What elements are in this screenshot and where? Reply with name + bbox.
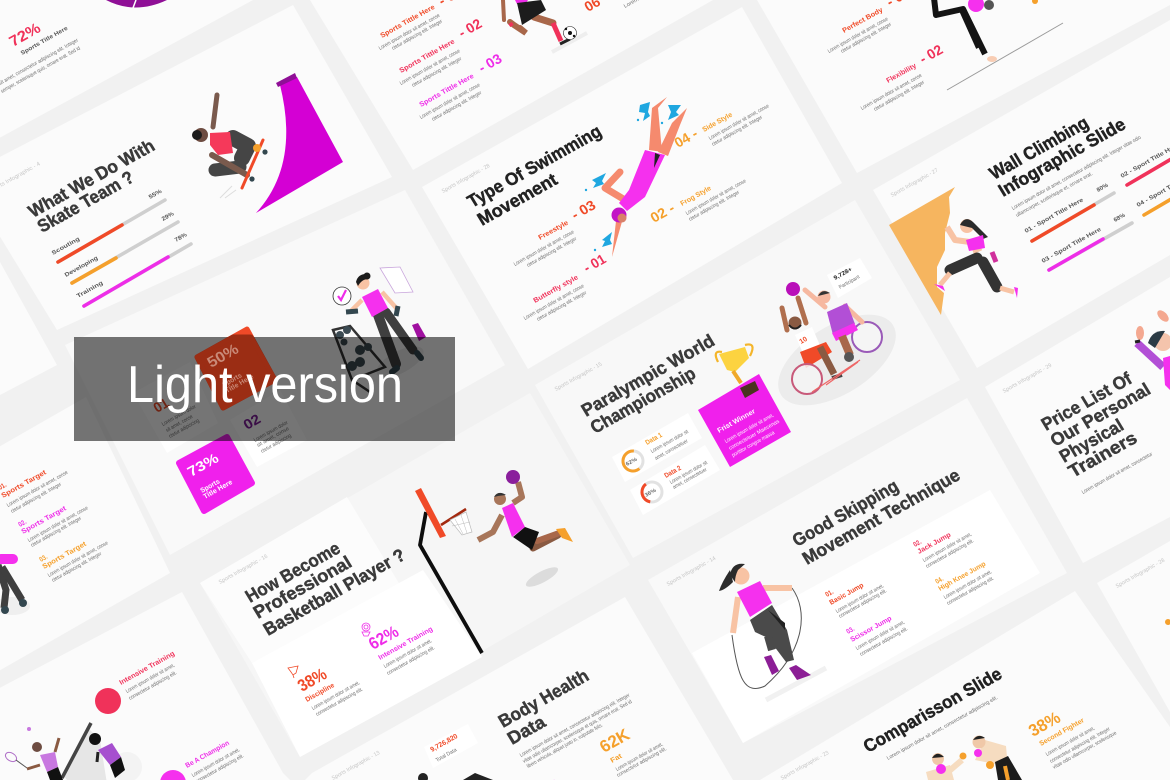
progress labels: 02 - Sport Title Here: [1120, 142, 1170, 180]
list item 1: ctetur adipiscing elit. Integer: [391, 19, 444, 52]
label card: [424, 724, 478, 768]
gym illustration: [333, 267, 428, 392]
title: Paralympic World: [578, 331, 718, 420]
info card 02: Lorem ipsum dolor: [253, 420, 289, 444]
info card 02: 02: [240, 410, 264, 433]
first winner card: Lorem ipsum dolor sit amet,: [724, 413, 775, 445]
stat 38 percent: vitae odio ullamcorper, scelerisque: [1052, 730, 1118, 771]
list item 3: Sports Tittle Here: [418, 73, 475, 109]
swimmer illustration: [585, 97, 687, 257]
slide: gym: [65, 190, 505, 555]
item flexibility: ctetur adipiscing elit. Integer: [873, 80, 926, 113]
item be a champion: Be A Champion: [184, 740, 231, 770]
list item 2: Lorem ipsum dolor sit amet, conse: [399, 48, 461, 87]
description: Lorem ipsum dolor sit amet, consectetur adipiscing elit. Integer vitae odio: [1011, 135, 1142, 212]
progress labels: Developing: [64, 255, 100, 279]
item 02: 02.: [912, 539, 923, 549]
progress labels: 55%: [148, 189, 163, 201]
item 03 freestyle: ctetur adipiscing elit. Integer: [526, 236, 578, 269]
badminton illustration: [4, 723, 142, 780]
white panel: [692, 490, 1040, 743]
50 percent card under banner: Sports: [221, 372, 243, 389]
item flexibility: [860, 41, 946, 113]
item 02 frog style: Lorem ipsum dolor sit amet, conse: [685, 178, 747, 217]
overlay banner: [74, 337, 455, 441]
list item 6: [581, 0, 686, 15]
item 01: Basic Jump: [828, 582, 865, 607]
item 01: consectetur adipiscing elit.: [838, 588, 888, 620]
slide: sports target: [0, 397, 170, 676]
data card 1: 62%: [625, 457, 639, 468]
info card 01: sit amet, conse: [165, 414, 194, 434]
slide number: Sports Infographic - 14: [666, 556, 717, 588]
label card: Total Data: [435, 747, 458, 764]
trophy: [716, 344, 759, 398]
slide: swimming: [422, 7, 842, 369]
title: Trainers: [1065, 428, 1141, 481]
item 03: Scissor Jump: [849, 615, 893, 644]
target 01: Lorem ipsum dolor sit amet, conse: [6, 470, 69, 509]
slide: basketball: [200, 393, 630, 757]
target 01: ctetur adipiscing elit. Integer: [10, 482, 63, 515]
title: Movement Technique: [799, 465, 964, 568]
info card 01: 01: [150, 394, 172, 416]
title: Wall Climbing: [986, 113, 1092, 183]
stat 62 percent: 62%: [365, 622, 402, 653]
item intensive training: Intensive Training: [118, 650, 176, 687]
item 02: [912, 532, 975, 570]
item 03 freestyle: - 03: [568, 197, 599, 223]
rock wall: [889, 187, 955, 315]
item 02: Lorem ipsum dolor sit amet,: [922, 532, 973, 564]
data card 2: [630, 445, 720, 515]
item 03: consectetur adipiscing elit.: [859, 626, 909, 658]
boxers illustration: [926, 736, 1022, 780]
item 03 freestyle: Lorem ipsum dolor sit amet, conse: [513, 229, 575, 268]
progress labels: Scouting: [51, 236, 82, 257]
list item 3: Lorem ipsum dolor sit amet, conse: [419, 82, 481, 121]
trainer illustration: [1135, 308, 1170, 390]
stat 62K: 62K: [596, 725, 634, 756]
item perfect body: Perfect Body: [841, 7, 884, 35]
progress labels: 78%: [174, 232, 188, 244]
stat 38 percent: [294, 665, 364, 718]
slide number: Sports Infographic - 16: [218, 554, 269, 586]
info card 02: [230, 390, 307, 467]
stat description: sit amet, consectetur adipiscing elit. Integer: [0, 38, 80, 87]
title: Skate Team ?: [34, 167, 137, 236]
item 01: 01.: [824, 589, 835, 599]
item 02 frog style: 02 -: [647, 200, 678, 226]
title: [1038, 368, 1154, 481]
slide: skipping: [648, 398, 1067, 743]
item intensive training: consectetur adipiscing elit.: [128, 670, 178, 702]
orange fragment: [1165, 619, 1170, 625]
item 02: consectetur adipiscing elit.: [925, 538, 975, 570]
item 01 butterfly: ctetur adipiscing elit. Integer: [536, 290, 588, 323]
item 03: Lorem ipsum dolor sit amet,: [855, 620, 906, 652]
item 02 frog style: Frog Style: [679, 185, 713, 208]
item 01 butterfly: Butterfly style: [532, 274, 580, 305]
73 percent card: 73%: [184, 449, 222, 480]
50 percent card under banner: Title Here: [224, 374, 255, 395]
stat 38 percent: Lorem ipsum dolor sit amet,: [311, 680, 362, 712]
target 03: 03.: [38, 554, 49, 564]
item 04: High Knee Jump: [937, 561, 987, 593]
first winner card: consectetuer Maecenas: [728, 419, 781, 452]
description: ullamcorper, scelerisque et, ornare erat.: [1015, 171, 1094, 219]
item 04: 04.: [934, 576, 945, 586]
item flexibility: Lorem ipsum dolor sit amet, conse: [860, 73, 923, 112]
stat 62 percent: Lorem ipsum dolor sit amet,: [383, 638, 434, 670]
stat 38 percent: Second Fighter: [1038, 717, 1086, 748]
slide: sports titles: [310, 0, 713, 170]
target 03: [38, 540, 109, 584]
info card 01: ctetur adipiscing: [168, 418, 201, 440]
target 01: [0, 469, 69, 515]
item 04 side style: ctetur adipiscing elit. Integer: [711, 115, 764, 148]
target 02: [17, 505, 89, 549]
wheelchair athletes illustration: [763, 282, 911, 424]
item 04: Lorem ipsum dolor sit amet,: [943, 569, 994, 601]
stat 62 percent: consectetur adipiscing elit.: [386, 645, 436, 677]
list item 3: - 03: [475, 50, 505, 76]
info card 01: Lorem ipsum dolor: [161, 404, 197, 428]
target 03: Sports Target: [41, 540, 88, 571]
73 percent card: [179, 437, 252, 511]
item 01: Lorem ipsum dolor sit amet,: [835, 583, 886, 615]
description: Lorem ipsum dolor sit amet, consectetur: [1081, 451, 1154, 496]
item 02 frog style: [647, 178, 747, 226]
stat 38 percent: consectetur adipiscing elit. Integer: [1049, 726, 1112, 765]
progress labels: 01 - Sport Title Here: [1024, 197, 1085, 235]
item 03 freestyle: Freestyle: [537, 220, 570, 242]
stat 72%: 72%: [6, 20, 44, 50]
description: Lorem ipsum dolor sit amet, consectetur adipiscing elit. Integer: [519, 692, 631, 759]
target 03: ctetur adipiscing elit. Integer: [51, 551, 103, 584]
slide: wall climbing: [873, 20, 1170, 368]
slide: price list: [985, 277, 1170, 563]
50 percent card top: [197, 329, 275, 408]
item intensive training: [118, 650, 178, 702]
skipping girl illustration: [719, 564, 826, 700]
basketball hoop: [415, 488, 482, 653]
subtitle: Lorem ipsum dolor sit amet, consectetur adipiscing elit.: [886, 695, 999, 762]
first winner card: porttitor congue massa: [731, 430, 776, 459]
stat 62 percent: [365, 622, 436, 677]
item flexibility: - 02: [916, 41, 946, 67]
slide number: Sports Infographic - 28: [441, 163, 491, 195]
title: Our Personal: [1047, 379, 1154, 450]
slide: top-left statistics: [0, 0, 253, 143]
stat description: semper, scelerisque quis, ornare erat. Sed id: [0, 46, 82, 95]
first winner card: Frist Winner: [716, 408, 757, 435]
progress labels: [1024, 142, 1170, 265]
slide: paralympic: [535, 200, 960, 558]
stat 62 percent: Intensive Training: [377, 626, 434, 662]
title: Physical: [1056, 415, 1127, 466]
stat 38 percent: Discipline: [304, 682, 336, 704]
item perfect body: ctetur adipiscing elit. Integer: [840, 22, 893, 55]
list item 2: [398, 15, 485, 89]
item 04 side style: [671, 103, 770, 151]
slide: comparison: [760, 591, 1170, 780]
climber illustration: [934, 219, 1018, 298]
item intensive training: Lorem ipsum dolor sit amet,: [125, 663, 176, 695]
skate ramp: [256, 73, 343, 213]
label: participants: [827, 258, 872, 298]
icon: trophy outline: [288, 666, 298, 678]
slide: badminton: [0, 592, 290, 780]
item 04: [934, 561, 995, 607]
first winner card: [698, 374, 791, 467]
stat 62K: consectetur adipiscing elit.: [616, 746, 668, 779]
stat 38 percent: 38%: [1025, 708, 1064, 740]
figure fragment: [418, 773, 493, 780]
figure fragment: [0, 554, 30, 615]
info card 01: [133, 362, 218, 453]
title: What We Do With: [25, 136, 158, 221]
info card 02: ctetur adipiscing: [260, 433, 293, 455]
item 01: [824, 582, 888, 620]
slide number: Sports Infographic - 27: [890, 168, 939, 199]
icon circle magenta: [160, 770, 186, 780]
target 02: 02.: [17, 519, 28, 529]
title: Movement: [474, 169, 561, 229]
item 02: Jack Jump: [916, 532, 952, 556]
data card 1: Data 1: [644, 432, 664, 447]
info card 02: sit amet, conse: [256, 426, 290, 449]
progress labels: 29%: [161, 211, 175, 223]
item 02 frog style: ctetur adipiscing elit. Integer: [688, 190, 741, 223]
title: Comparisson Slide: [860, 664, 1005, 756]
list item 2: ctetur adipiscing elit. Integer: [411, 56, 463, 89]
title: Professional: [250, 552, 355, 622]
50 percent card under banner: 50%: [204, 341, 242, 371]
data card 2: Data 2: [663, 465, 683, 480]
target 02: Sports Target: [20, 505, 68, 536]
item 03 freestyle: [513, 197, 599, 269]
item 04: consectetur adipiscing elit.: [946, 576, 995, 607]
item be a champion: Lorem ipsum dolor sit amet,: [191, 747, 242, 779]
progress labels: Training: [76, 280, 105, 300]
stat 38 percent: 38%: [294, 665, 330, 695]
item 04 side style: Lorem ipsum dolor sit amet, conse: [708, 103, 770, 142]
list item 1: Sports Tittle Here: [379, 4, 436, 40]
73 percent card: Sports: [199, 478, 221, 495]
data card 1: amet, consectetuer: [654, 438, 689, 462]
item 03: 03.: [845, 626, 856, 636]
title: Body Health: [495, 666, 592, 731]
title: Good Skipping: [789, 476, 902, 550]
title: Data: [504, 711, 550, 748]
slide number: Sports Infographic - 15: [554, 362, 603, 393]
label: participants: Participant: [838, 274, 862, 291]
title: Basketball Player ?: [260, 545, 409, 639]
slide: far-right fragment: [1097, 541, 1170, 712]
data card 1: [612, 413, 702, 482]
footballer illustration: [503, 0, 587, 52]
slide number: Sports Infographic - 28: [1115, 558, 1166, 590]
item 04 side style: 04 -: [671, 125, 701, 151]
list item 1: Lorem ipsum dolor sit amet, conse: [378, 13, 441, 52]
stat 62K: Lorem ipsum dolor sit amet,: [615, 742, 665, 773]
stat 62K: [596, 725, 668, 779]
target 02: ctetur adipiscing elit. Integer: [30, 516, 83, 549]
title: Infographic Slide: [995, 114, 1129, 200]
description: libero vehicula, aliquet justo in, vulputate felis.: [526, 723, 604, 770]
label card: 9,726,820: [429, 733, 459, 754]
data card 2: Lorem ipsum dolor sit: [669, 460, 709, 486]
stat 38 percent: [1025, 708, 1118, 771]
target 03: Lorem ipsum dolor sit amet, conse: [47, 540, 109, 579]
pie chart fragment: [106, 0, 167, 8]
progress labels: [51, 189, 188, 300]
progress labels: 80%: [1096, 183, 1110, 194]
progress labels: 68%: [1113, 213, 1127, 224]
item 03: [845, 615, 909, 658]
list item 2: - 02: [455, 15, 485, 41]
description: [1011, 135, 1142, 219]
50 percent card under banner: [197, 337, 275, 408]
list item 2: Sports Tittle Here: [398, 38, 456, 75]
data card 1: Lorem ipsum dolor sit: [650, 429, 690, 455]
slide: body health: [305, 597, 733, 780]
data card 2: 36%: [644, 488, 658, 499]
item flexibility: Flexibility: [885, 63, 918, 85]
yoga illustration: [934, 0, 1063, 90]
list item 3: ctetur adipiscing elit. Integer: [431, 90, 483, 123]
item perfect body: Lorem ipsum dolor sit amet, conse: [827, 16, 889, 55]
slide: far-left fragment: [0, 262, 57, 395]
description: vitae odio ullamcorper, scelerisque et quis, ornare erat. Sed id: [522, 699, 633, 765]
item 01 butterfly: - 01: [580, 251, 609, 276]
stat 38 percent: Lorem ipsum dolor sit amet,: [1045, 726, 1096, 758]
slide: skate team: [0, 5, 392, 330]
progress bars: [1032, 148, 1170, 270]
progress bars: [58, 200, 191, 306]
icon: medal outline: [362, 623, 370, 636]
title: Type Of Swimming: [464, 121, 605, 211]
left light panel: [200, 497, 400, 663]
stat 38 percent: consectetur adipiscing elit.: [315, 687, 364, 718]
73 percent card: Title Here: [202, 479, 234, 501]
title: Championship: [587, 363, 699, 437]
stat 62K: Fat: [609, 752, 624, 765]
item 01 butterfly: Lorem ipsum dolor sit amet, conse: [523, 283, 585, 322]
item 04 side style: Side Style: [701, 112, 734, 134]
progress labels: 03 - Sport Title Here: [1041, 226, 1103, 265]
banner text: Light version: [127, 356, 403, 414]
slide: yoga: [757, 0, 1170, 173]
label: participants: 9,728+: [833, 266, 854, 282]
skater illustration: [192, 95, 268, 198]
target 02: Lorem ipsum dolor sit amet, conse: [27, 505, 89, 544]
player illustration: [478, 470, 573, 590]
target 01: Sports Target: [0, 469, 48, 500]
stat label: Sports Title Here: [20, 25, 70, 57]
white stat panel: [252, 570, 482, 757]
title: How Become: [242, 538, 344, 606]
wheelchair athletes illustration: 10: [798, 336, 809, 346]
list item 3: [418, 50, 505, 123]
icon circle: [95, 688, 121, 714]
title: Price List Of: [1038, 368, 1136, 434]
item 01 butterfly: [523, 251, 609, 323]
slide number: Sports Infographic - 29: [1002, 363, 1053, 395]
data card 2: amet, consectetuer: [672, 467, 708, 491]
